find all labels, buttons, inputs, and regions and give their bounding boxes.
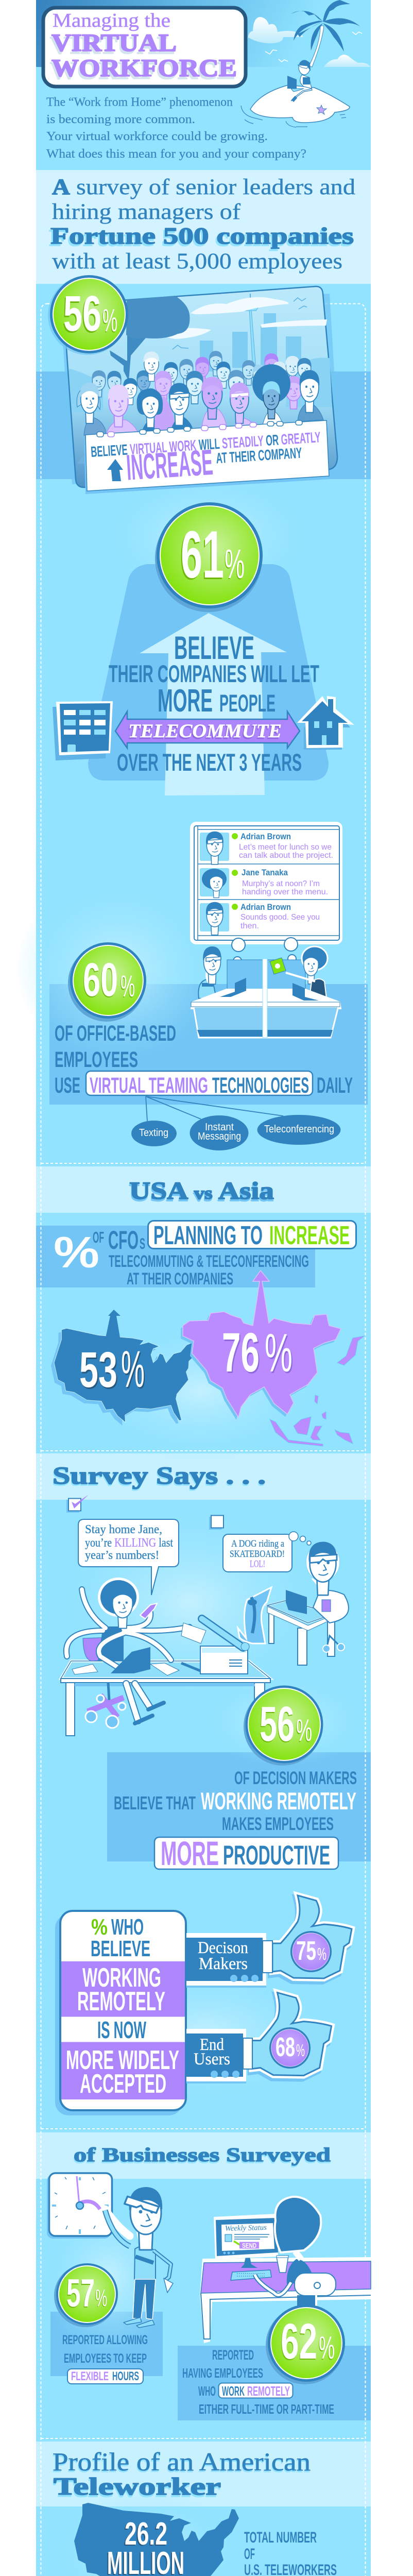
57% text line 1: REPORTED ALLOWING [62, 2333, 148, 2347]
illustration: woman at computer desk [200, 2197, 371, 2343]
icon: clouds [248, 17, 371, 67]
tree [110, 296, 190, 381]
sign [84, 420, 330, 494]
speech bubble right: SKATEBOARD! [230, 1549, 285, 1560]
coffee cup [277, 2256, 288, 2273]
who: WHO [198, 2383, 216, 2399]
icon: USA arrow [106, 1310, 121, 1338]
bubble: texting: Texting [139, 1127, 168, 1139]
ruler [202, 1619, 249, 1651]
telecommute label: TELECOMMUTE [128, 721, 282, 742]
woman's body [83, 1626, 124, 1661]
57 number: 57 [66, 2272, 95, 2315]
61 number: 61 [181, 517, 224, 592]
survey text line 3: Fortune 500 companies [50, 223, 354, 249]
panel: 56% crowd card [48, 275, 340, 494]
more productive box: PRODUCTIVE [223, 1840, 330, 1871]
sign text: AT THEIR COMPANY [216, 445, 302, 467]
chart: thumb end users 68% [186, 1993, 332, 2083]
60 number: 60 [83, 954, 118, 1006]
laptop [286, 1590, 307, 1614]
map: USA [51, 1310, 202, 1426]
desk scene [191, 946, 341, 1038]
percent sign: % [121, 1341, 145, 1398]
printer [181, 1646, 248, 1674]
panel: survey says [53, 1462, 357, 1872]
checkbox empty [209, 1516, 223, 1530]
chat row 1 [200, 832, 333, 865]
intro text: What does this mean for you and your company? [46, 147, 306, 161]
desk [191, 989, 341, 1009]
accepted: ACCEPTED [80, 2069, 166, 2099]
more productive box [154, 1834, 338, 1872]
icon: up arrow [107, 459, 123, 481]
badge 75%: 75 [296, 1936, 316, 1966]
speech bubble left [78, 1519, 179, 1595]
desk [200, 2257, 371, 2343]
chat row 3 [200, 902, 320, 935]
title line 2: VIRTUAL [51, 29, 177, 57]
stat badge 57% [54, 2263, 118, 2327]
intro text: is becoming more common. [46, 113, 195, 126]
chat row 3: then. [240, 922, 259, 930]
panel: 61% telecommute road [53, 502, 354, 795]
man's body [313, 1577, 349, 1652]
76% number: 76 [222, 1321, 260, 1383]
more widely: MORE WIDELY [66, 2045, 179, 2075]
heading: USA vs Asia [129, 1177, 274, 1205]
title line 1: Managing the [53, 10, 170, 31]
survey text line 2: hiring managers of [52, 200, 241, 224]
title box [43, 8, 246, 87]
percent sign: % [265, 1323, 292, 1383]
title line 3: WORKFORCE [51, 55, 237, 82]
57% text line 2: EMPLOYEES TO KEEP [64, 2351, 147, 2366]
more productive box: MORE [161, 1834, 219, 1872]
panel: profile of teleworker [47, 2447, 354, 2576]
badge 68% [269, 2027, 311, 2069]
panel: 60% virtual teaming [55, 822, 353, 1150]
keyboard [231, 2270, 271, 2280]
believe: BELIEVE [91, 1936, 150, 1961]
stat badge 61% [155, 502, 263, 612]
chat row 1: can talk about the project. [239, 851, 333, 860]
percent symbol: % [54, 1228, 99, 1277]
intro text: The “Work from Home” phenomenon [46, 96, 233, 109]
60% text line 2: EMPLOYEES [55, 1047, 138, 1072]
table [267, 1600, 335, 1665]
dog [238, 1587, 271, 1643]
at their companies: AT THEIR COMPANIES [127, 1269, 233, 1288]
makes employees: MAKES EMPLOYEES [222, 1814, 334, 1834]
panel: USA vs Asia [51, 1177, 365, 1446]
sign fingers [97, 420, 302, 437]
percent sign: % [296, 1713, 312, 1748]
survey text line 1: A survey of senior leaders and [52, 175, 355, 199]
26.2: 26.2 [125, 2516, 167, 2552]
intro text: Your virtual workforce could be growing. [46, 130, 268, 143]
people line: PEOPLE [219, 689, 276, 717]
virtual teaming box: VIRTUAL TEAMING [90, 1073, 208, 1098]
speech bubble right: LOL! [250, 1559, 265, 1569]
chat row 3: Sounds good. See you [240, 913, 320, 922]
illustration: man at clock [105, 2187, 173, 2328]
percent sign: % [225, 541, 245, 587]
percent sign: % [102, 303, 117, 338]
woman at desk [270, 946, 328, 998]
laptop and papers [72, 1623, 206, 1675]
label decision makers: Makers [199, 1955, 248, 1973]
bubble: teleconferencing [257, 1115, 341, 1145]
heading: Survey Says . . . [53, 1462, 266, 1489]
bubble: instant messaging: Instant [205, 1122, 234, 1133]
chart: thumb decision makers 75% [186, 1895, 352, 1988]
total number text [244, 2529, 337, 2576]
62 number: 62 [281, 2313, 317, 2369]
badge 75%: % [317, 1944, 326, 1963]
badge 68%: % [296, 2041, 305, 2060]
total number text: OF [244, 2546, 255, 2563]
having employees: HAVING EMPLOYEES [182, 2365, 263, 2381]
percent sign: % [121, 970, 135, 1003]
stat badge 56% second [244, 1686, 323, 1766]
badge 68%: 68 [276, 2032, 295, 2062]
remotely: REMOTELY [77, 1987, 165, 2016]
total number text: TOTAL NUMBER [244, 2529, 317, 2546]
bubble: teleconferencing: Teleconferencing [264, 1124, 334, 1135]
stat badge 62% [266, 2304, 345, 2384]
map: USA 26.2 million [74, 2503, 239, 2576]
right laptop [292, 983, 319, 1001]
panel: who believe card [55, 1911, 186, 2115]
illustration: busy woman at desk [61, 1578, 270, 1736]
decoration: dashed frame [41, 304, 366, 2576]
crowd front row [77, 364, 323, 435]
work remotely box: WORK [222, 2383, 245, 2399]
man's head [306, 1541, 340, 1595]
stat badge 56% [48, 275, 128, 355]
percent sign: % [95, 2284, 107, 2311]
stat badge 60% [68, 942, 146, 1022]
percent sign: % [319, 2330, 335, 2366]
chat row 1: Let’s meet for lunch so we [239, 843, 332, 852]
label end users: Users [194, 2050, 230, 2069]
chat window [190, 822, 342, 944]
card picture [64, 286, 337, 487]
woman's arms [66, 1589, 190, 1668]
big arrow [140, 613, 287, 795]
who: WHO [111, 1914, 144, 1940]
desk [61, 1661, 270, 1736]
icon: office building [53, 701, 113, 760]
working: WORKING [82, 1963, 161, 1993]
chat row 2: handing over the menu. [242, 888, 328, 896]
woman [255, 2197, 336, 2308]
label end users: End [200, 2036, 224, 2054]
left laptop [220, 978, 246, 997]
cfos label: CFO [108, 1226, 139, 1255]
chat row 2: Jane Tanaka [242, 868, 288, 877]
over the next 3 years: OVER THE NEXT 3 YEARS [117, 749, 302, 776]
monitor [214, 2214, 278, 2268]
man at desk [198, 946, 221, 998]
office chair [85, 1683, 126, 1728]
believe heading: BELIEVE [174, 630, 254, 666]
speech bubble left: year’s numbers! [85, 1549, 159, 1562]
survey text line 4: with at least 5,000 employees [52, 249, 342, 274]
woman's legs [126, 1684, 164, 1723]
is now: IS NOW [97, 2016, 146, 2043]
60% text line 1: OF OFFICE-BASED [55, 1021, 176, 1046]
chat row 2: Murphy’s at noon? I’m [242, 879, 320, 888]
icon: house [297, 696, 354, 750]
bubble: instant messaging [190, 1115, 248, 1150]
daily label: DAILY [317, 1073, 353, 1098]
cfos small s: S [140, 1235, 145, 1252]
label decision makers: Decison [198, 1939, 248, 1957]
speech bubble left: Stay home Jane, [85, 1523, 162, 1536]
intro text [46, 96, 306, 161]
chat row 3: Adrian Brown [240, 902, 291, 912]
checkbox checked [66, 1495, 89, 1513]
panel: of businesses surveyed [47, 2144, 371, 2417]
send button: SEND [242, 2242, 256, 2249]
crowd back row [77, 351, 324, 464]
bubble: instant messaging: Messaging [198, 1131, 241, 1142]
label decision makers [198, 1939, 248, 1973]
woman's head [98, 1578, 157, 1629]
speech bubble right: A DOG riding a [231, 1538, 284, 1549]
chat row 1: Adrian Brown [240, 832, 291, 841]
work remotely box: REMOTELY [247, 2383, 290, 2399]
map: Asia [181, 1270, 365, 1446]
56 number: 56 [63, 285, 101, 342]
icon: palm tree [291, 0, 360, 67]
heading line 2: Teleworker [54, 2473, 221, 2500]
sign text [90, 429, 323, 490]
connector lines [146, 1096, 283, 1121]
thought bubbles [232, 938, 298, 975]
of label: OF [93, 1228, 104, 1246]
icon: island with man and laptop [241, 60, 350, 127]
work remotely box [218, 2383, 292, 2399]
heading line 1: Profile of an American [53, 2447, 311, 2476]
weekly status: Weekly Status [225, 2224, 267, 2233]
planning box: INCREASE [269, 1221, 350, 1250]
more line: MORE [158, 683, 213, 719]
percent green: % [91, 1914, 108, 1940]
sign text: BELIEVE VIRTUAL WORK WILL STEADILY OR GREATLY [90, 429, 321, 461]
bubble: texting [131, 1121, 177, 1146]
panel: background bands [15, 371, 372, 2576]
heading: of Businesses Surveyed [74, 2144, 331, 2166]
speech bubble left: you’re KILLING last [85, 1536, 173, 1550]
panel: survey intro [36, 170, 371, 284]
53% number: 53 [79, 1342, 117, 1398]
road background [88, 564, 329, 781]
cityscape [68, 294, 332, 412]
badge 75% [290, 1931, 332, 1972]
believe that: BELIEVE THAT [114, 1792, 196, 1814]
label end users [194, 2036, 230, 2069]
flexible hours box: FLEXIBLE [71, 2369, 109, 2383]
icon: clock [47, 2173, 112, 2239]
panel: header [36, 0, 371, 170]
chat row 2 [200, 868, 328, 898]
56 number: 56 [260, 1697, 295, 1752]
icon: birds [265, 32, 362, 62]
virtual teaming box: TECHNOLOGIES [212, 1073, 309, 1098]
icon: islands [270, 1336, 365, 1446]
double arrow [115, 711, 300, 748]
use label: USE [55, 1073, 80, 1098]
planning box: PLANNING TO [153, 1221, 263, 1250]
flexible hours box: HOURS [112, 2369, 139, 2383]
sign text: INCREASE [125, 442, 214, 488]
speech bubble right [223, 1532, 311, 1572]
illustration: man with dog [238, 1541, 349, 1665]
reported: REPORTED [212, 2347, 254, 2363]
